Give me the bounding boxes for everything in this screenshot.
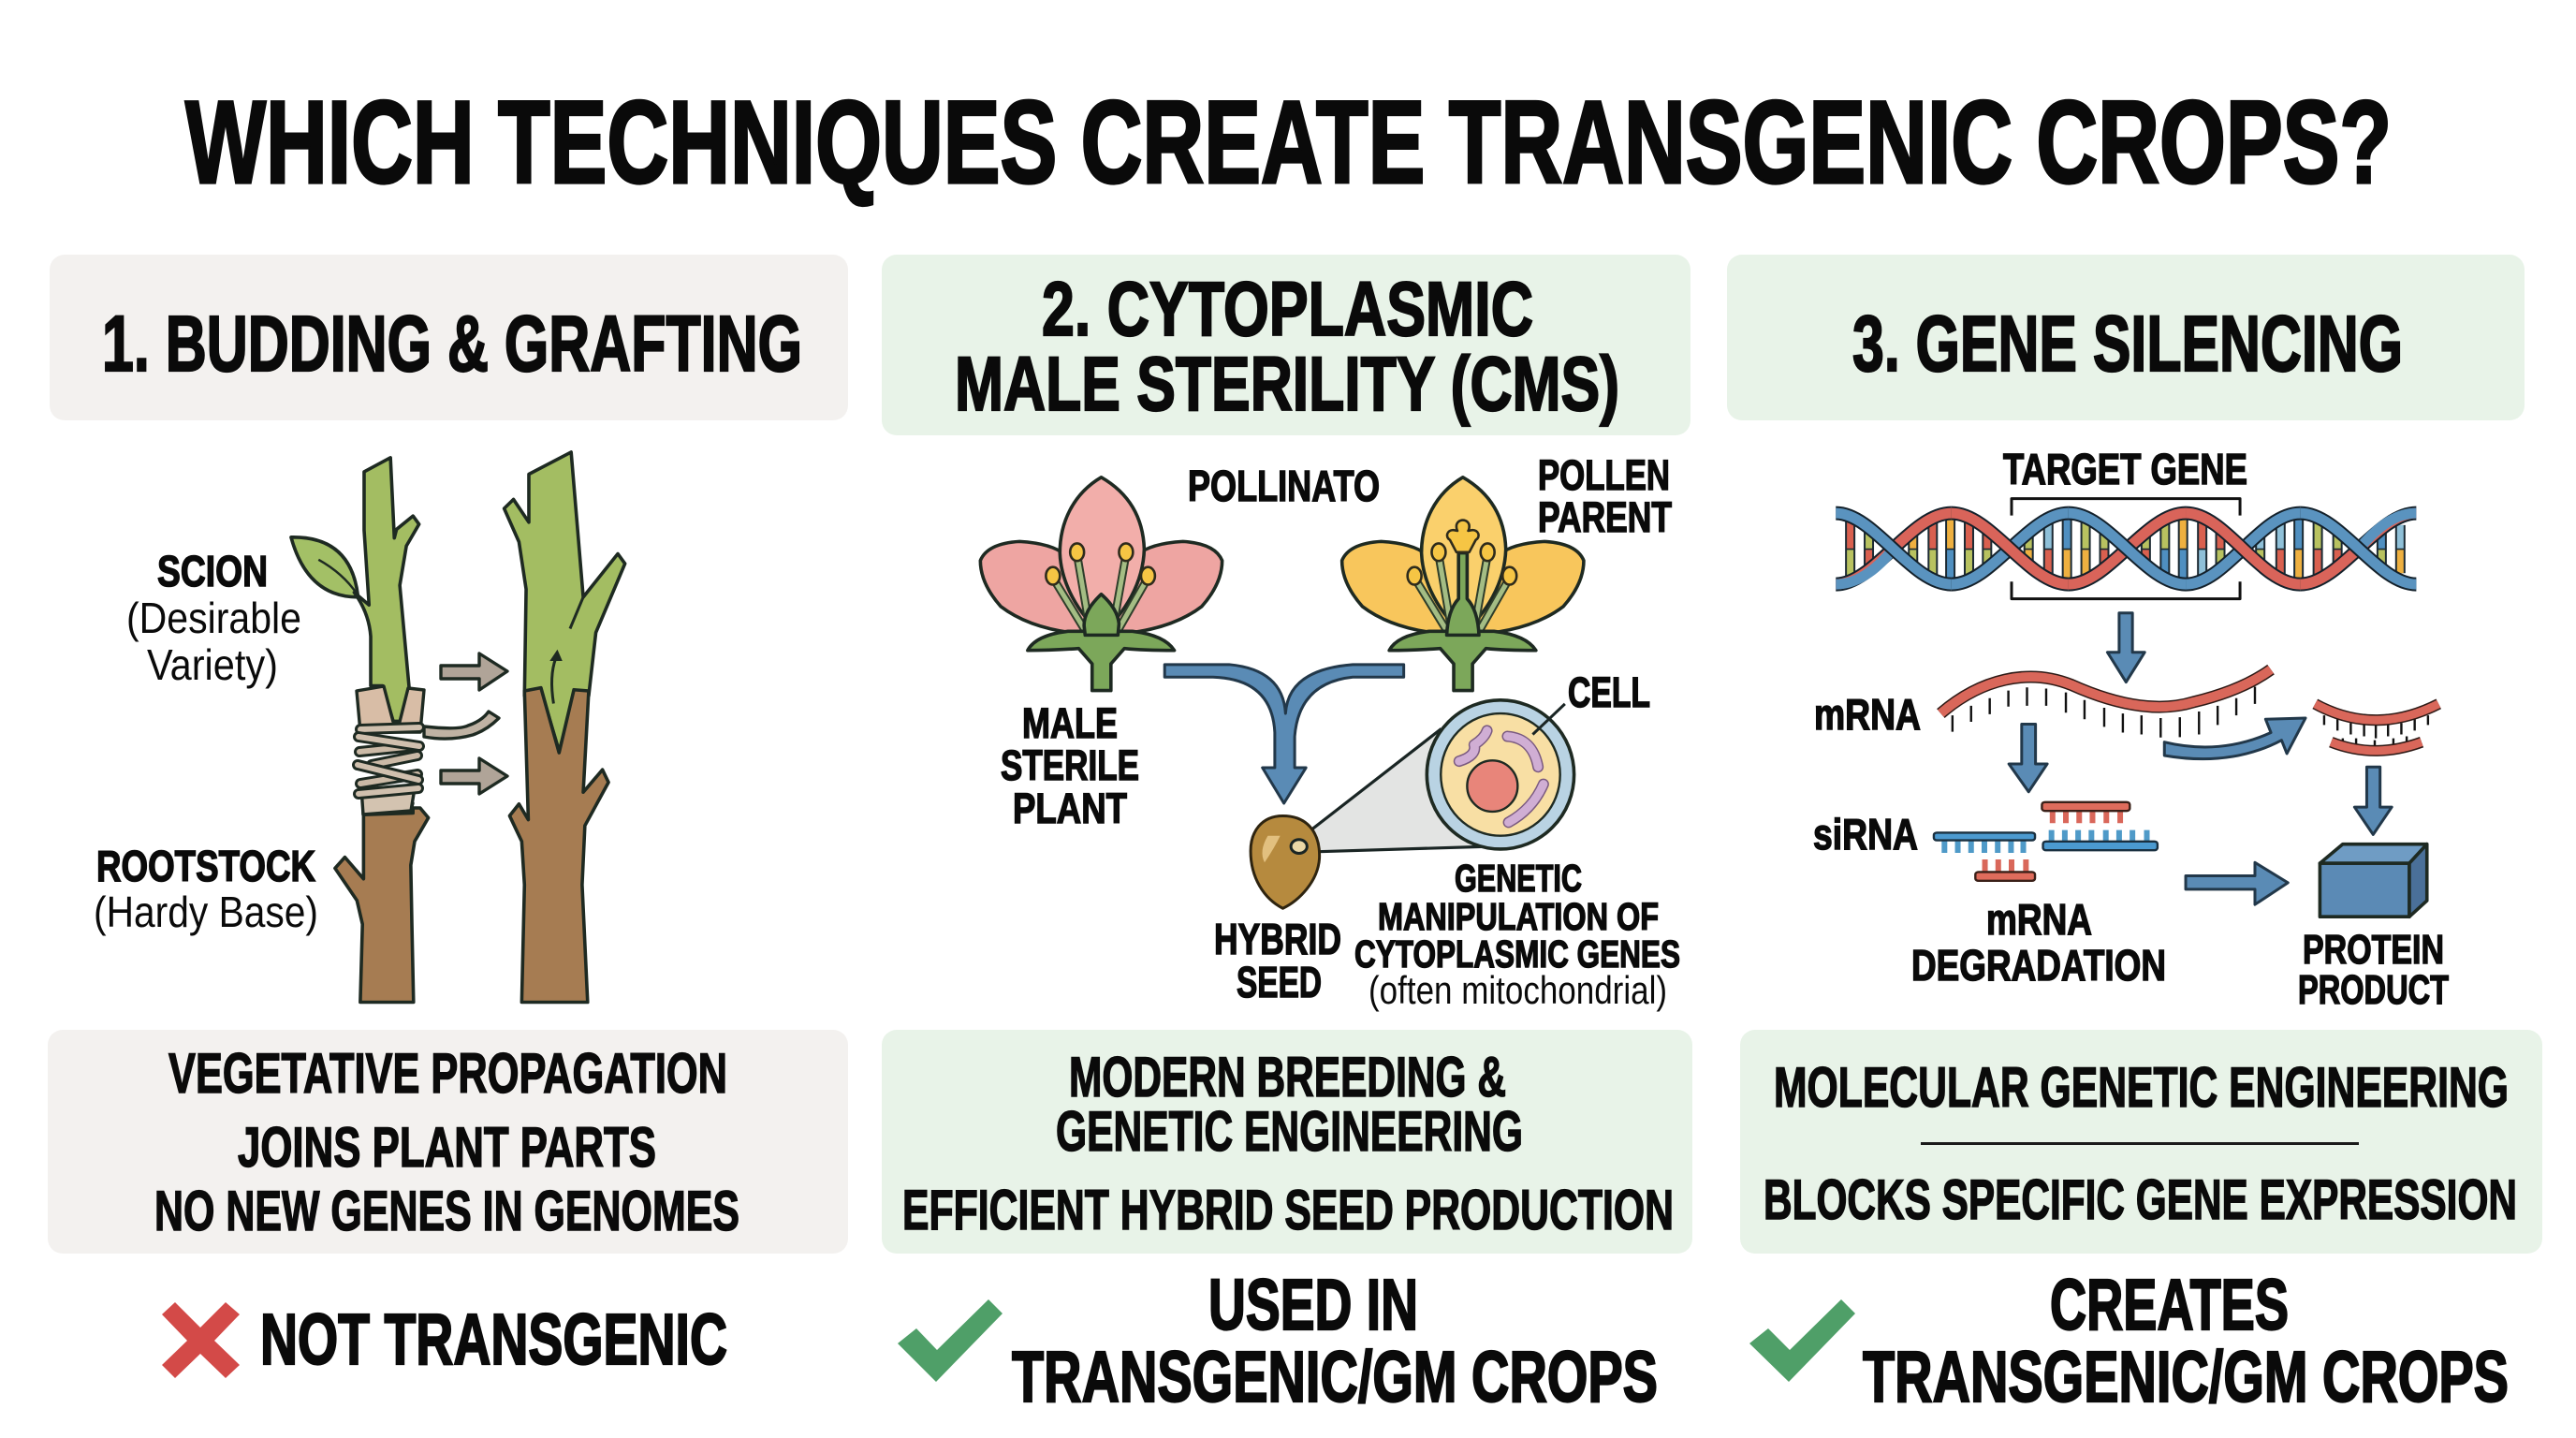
panel: gene silencing summary xyxy=(1740,1030,2542,1254)
icon: cell magnification xyxy=(1296,700,1574,852)
verdict text: NOT TRANSGENIC xyxy=(260,1299,727,1380)
panel: gene silencing header xyxy=(1727,255,2525,420)
verdict text xyxy=(1012,1265,1658,1417)
panel: CMS summary xyxy=(882,1030,1692,1254)
verdict text: TRANSGENIC/GM CROPS xyxy=(1012,1337,1658,1417)
verdict text: CREATES xyxy=(2050,1265,2289,1345)
joined plant xyxy=(505,452,625,1003)
label: protein product: PRODUCT xyxy=(2298,967,2449,1013)
label: scion: (Desirable xyxy=(126,594,301,642)
icon: ribosome translation xyxy=(2315,704,2438,751)
panel: budding summary: NO NEW GENES IN GENOMES xyxy=(154,1180,739,1242)
label: hybrid seed: SEED xyxy=(1237,958,1322,1006)
panel: CMS summary: EFFICIENT HYBRID SEED PRODUCTION xyxy=(902,1179,1674,1241)
scion stem with leaf xyxy=(291,458,419,721)
illustration: grafting diagram xyxy=(94,452,625,1003)
label: pollinator: POLLINATO xyxy=(1188,462,1380,510)
label: mRNA: mRNA xyxy=(1814,690,1921,739)
icon: hybrid seed xyxy=(1251,815,1320,908)
panel: cytoplasmic male sterility header xyxy=(882,255,1690,435)
icon: pollen parent yellow flower xyxy=(1342,477,1584,691)
label: genetic manipulation: MANIPULATION OF xyxy=(1378,895,1659,938)
label: male sterile plant: MALE xyxy=(1022,699,1118,747)
arrow: curved to translation xyxy=(2164,718,2305,759)
label: male sterile plant: STERILE xyxy=(1001,741,1139,789)
icon: protein cube xyxy=(2320,844,2427,917)
label: pollen parent: PARENT xyxy=(1538,493,1672,541)
label: protein product xyxy=(2298,927,2449,1013)
verdict text xyxy=(1863,1265,2509,1417)
arrow: degradation to protein xyxy=(2186,862,2288,904)
verdict text: USED IN xyxy=(1208,1265,1418,1345)
label: genetic manipulation: GENETIC xyxy=(1455,857,1582,900)
grey arrows xyxy=(441,653,507,794)
illustration: gene silencing diagram xyxy=(1813,445,2449,1013)
label: hybrid seed: HYBRID xyxy=(1214,915,1341,963)
label: cell: CELL xyxy=(1568,668,1650,716)
illustration: CMS diagram xyxy=(980,451,1680,1012)
arrow: mRNA to siRNA xyxy=(2009,724,2047,792)
label: mRNA degradation: mRNA xyxy=(1986,895,2092,944)
panel: budding and grafting header: 1. BUDDING & GRAFTING xyxy=(102,300,802,388)
panel: budding summary xyxy=(48,1030,848,1254)
arrow: gene to mRNA xyxy=(2107,613,2144,682)
arrow: to protein xyxy=(2354,767,2392,834)
label: mRNA degradation xyxy=(1911,895,2166,990)
label: siRNA: siRNA xyxy=(1813,810,1918,858)
verdict: not transgenic xyxy=(162,1299,727,1380)
panel: CMS summary: MODERN BREEDING & xyxy=(1069,1046,1506,1108)
label: genetic manipulation: (often mitochondrial) xyxy=(1368,968,1667,1012)
label: male sterile plant xyxy=(1001,699,1139,832)
panel: budding summary: VEGETATIVE PROPAGATION xyxy=(168,1042,727,1105)
label: rootstock xyxy=(94,842,318,936)
label: male sterile plant: PLANT xyxy=(1013,785,1127,832)
icon: DNA double helix xyxy=(1836,499,2416,599)
label: protein product: PROTEIN xyxy=(2303,927,2444,973)
panel: budding and grafting header xyxy=(50,255,848,420)
label: hybrid seed xyxy=(1214,915,1341,1006)
rootstock with lower graft xyxy=(335,808,429,1003)
icon: mRNA strand xyxy=(1940,669,2271,738)
icon: green check xyxy=(1749,1299,1855,1382)
arrow: cross pollination xyxy=(1164,665,1404,803)
label: mRNA degradation: DEGRADATION xyxy=(1911,941,2166,990)
panel: cytoplasmic male sterility header: 2. CYTOPLASMIC xyxy=(1042,267,1533,352)
grafting tape xyxy=(357,686,499,814)
label: scion: Variety) xyxy=(147,640,278,689)
verdict: creates transgenic crops xyxy=(1749,1265,2509,1417)
label: pollen parent xyxy=(1538,451,1672,541)
label: genetic manipulation xyxy=(1354,857,1680,1012)
panel: cytoplasmic male sterility header: MALE STERILITY (CMS) xyxy=(955,342,1619,427)
panel: budding summary: JOINS PLANT PARTS xyxy=(238,1116,656,1179)
icon: siRNA fragments xyxy=(1934,802,2158,881)
label: pollen parent: POLLEN xyxy=(1538,451,1670,499)
icon: red cross xyxy=(162,1302,240,1378)
label: scion: SCION xyxy=(157,547,268,595)
icon: green check xyxy=(898,1299,1003,1382)
icon: male sterile pink flower xyxy=(980,477,1222,691)
panel: CMS summary: GENETIC ENGINEERING xyxy=(1056,1100,1523,1163)
label: rootstock: ROOTSTOCK xyxy=(96,842,315,890)
label: genetic manipulation: CYTOPLASMIC GENES xyxy=(1354,932,1680,976)
label: rootstock: (Hardy Base) xyxy=(94,888,318,936)
verdict: used in transgenic crops xyxy=(898,1265,1658,1417)
label: scion xyxy=(126,547,301,689)
label: target gene: TARGET GENE xyxy=(2003,445,2247,493)
